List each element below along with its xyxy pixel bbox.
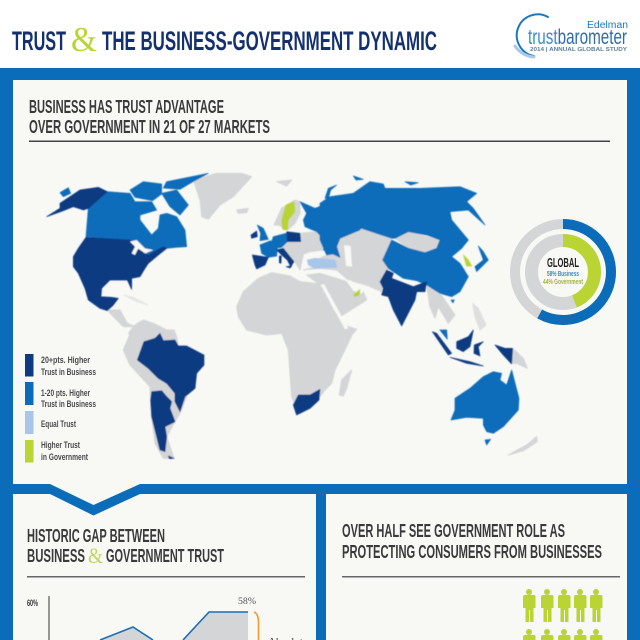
area chart: [27, 596, 308, 640]
title: &: [71, 20, 97, 59]
legend: 20+pts. Higher: [41, 355, 90, 366]
panel: government role: [326, 494, 627, 640]
title: THE BUSINESS-GOVERNMENT DYNAMIC: [102, 26, 437, 56]
donut chart: global trust: 58% Business: [547, 269, 579, 278]
grey land masses: [107, 173, 537, 458]
logo: Edelman Trust Barometer: [515, 14, 628, 57]
title: [12, 20, 437, 59]
great lakes: [130, 240, 153, 255]
seas: [321, 245, 365, 329]
logo: Edelman Trust Barometer: Edelman: [587, 20, 628, 31]
heading: historic gap: BUSINESS: [27, 546, 85, 566]
panel: historic gap: [13, 494, 316, 640]
countries: 1-20 pts higher trust in business: [60, 173, 519, 445]
area chart: 60%: [27, 598, 38, 608]
countries: higher trust in government: [282, 202, 472, 297]
heading: business trust advantage: OVER GOVERNMENT IN 21 OF 27 MARKETS: [29, 117, 270, 137]
logo: Edelman Trust Barometer: 2014 | ANNUAL GLOBAL STUDY: [530, 47, 628, 53]
heading: historic gap: &: [88, 543, 103, 568]
area chart: 58%: [238, 597, 256, 607]
heading: historic gap: [27, 526, 224, 568]
heading: business trust advantage: [29, 97, 270, 137]
heading: government role: [342, 521, 602, 562]
heading: historic gap: HISTORIC GAP BETWEEN: [27, 526, 165, 546]
legend: in Government: [41, 452, 89, 463]
legend: [25, 354, 96, 463]
legend: Trust in Business: [41, 367, 96, 378]
donut chart: global trust: GLOBAL: [547, 255, 579, 270]
title: TRUST: [12, 26, 66, 56]
legend: Trust in Business: [41, 399, 96, 410]
panel: world map: [13, 80, 627, 505]
countries: 20+ pts higher trust in business: [47, 187, 513, 459]
heading: historic gap: GOVERNMENT TRUST: [106, 546, 224, 566]
legend: 1-20 pts. Higher: [41, 388, 90, 399]
donut chart: global trust: 44% Government: [543, 277, 583, 286]
donut chart: global trust: [515, 224, 611, 320]
country: Turkey, equal trust: [307, 258, 337, 268]
legend: Higher Trust: [41, 440, 81, 451]
legend: Equal Trust: [41, 419, 77, 430]
world map: [47, 173, 537, 459]
heading: business trust advantage: BUSINESS HAS TRUST ADVANTAGE: [29, 97, 224, 117]
icons: people: [523, 589, 602, 640]
